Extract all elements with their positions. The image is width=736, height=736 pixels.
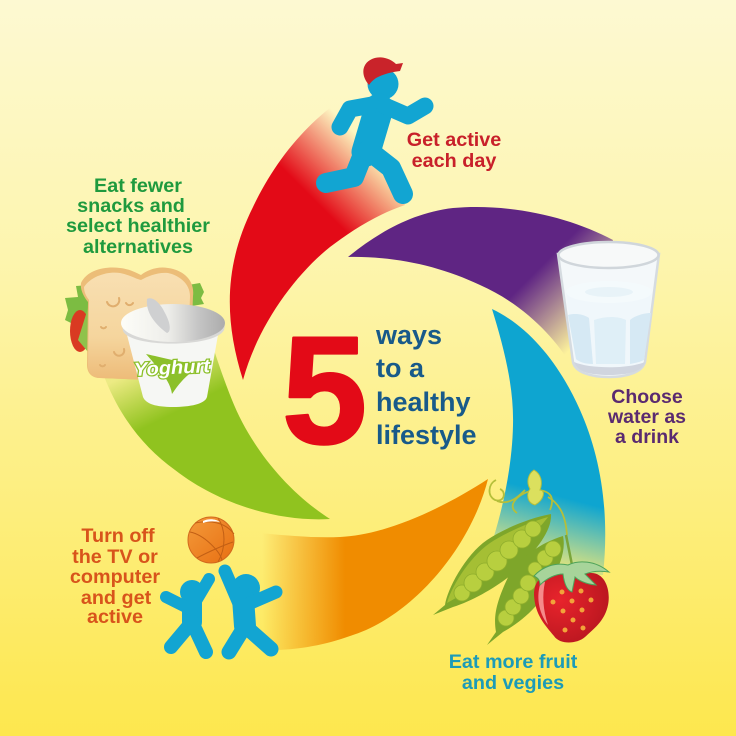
icon: pea pod right bbox=[487, 536, 564, 645]
icon: pea pod left bbox=[433, 514, 551, 615]
label: eat more fruit bbox=[449, 651, 578, 694]
label: eat fewer snacks: select healthier bbox=[66, 215, 210, 237]
label: turn off the tv: and get bbox=[81, 587, 152, 609]
icon: strawberry bbox=[534, 562, 609, 642]
icon: glass of water bbox=[558, 242, 659, 377]
label: turn off the tv: computer bbox=[70, 566, 160, 588]
swirl segment: green bbox=[100, 350, 330, 519]
label: eat more fruit: Eat more fruit bbox=[449, 651, 578, 673]
label: choose water: Choose bbox=[611, 386, 683, 408]
label: turn off the tv: Turn off bbox=[81, 525, 155, 547]
label: eat more fruit: and vegies bbox=[462, 672, 564, 694]
icon: red cap bbox=[363, 57, 403, 85]
centre heading bbox=[282, 305, 477, 476]
swirl segment: purple bbox=[348, 207, 613, 366]
icon: jumping children bbox=[166, 571, 276, 652]
label: get active: Get active bbox=[407, 129, 501, 151]
icon: child right bbox=[225, 571, 276, 652]
label: get active bbox=[407, 129, 501, 172]
icon: child left bbox=[166, 579, 209, 652]
heading words: to a bbox=[376, 353, 425, 383]
heading words: ways bbox=[375, 320, 442, 350]
icon: pea leaf bbox=[528, 470, 543, 505]
swirl segment: red bbox=[230, 97, 405, 380]
icon: basketball bbox=[188, 517, 234, 563]
icon: running figure bbox=[326, 57, 425, 194]
icon: pea vines bbox=[489, 470, 572, 565]
label: eat fewer snacks bbox=[66, 175, 210, 258]
label: choose water: a drink bbox=[615, 426, 679, 448]
label: choose water bbox=[607, 386, 686, 448]
label: get active: each day bbox=[412, 150, 496, 172]
label: turn off the tv bbox=[70, 525, 160, 628]
heading words bbox=[375, 320, 477, 450]
label: eat fewer snacks: snacks and bbox=[77, 195, 185, 217]
label: eat fewer snacks: Eat fewer bbox=[94, 175, 182, 197]
big number 5: 5 bbox=[282, 305, 367, 476]
label: turn off the tv: active bbox=[87, 606, 143, 628]
icon: sandwich bbox=[65, 267, 204, 380]
yoghurt label: Yoghurt bbox=[133, 356, 211, 381]
label: eat fewer snacks: alternatives bbox=[83, 236, 193, 258]
icon: yoghurt pot bbox=[121, 298, 225, 407]
icon: strawberry leaves bbox=[534, 562, 609, 592]
label: turn off the tv: the TV or bbox=[72, 546, 158, 568]
swirl segment: blue bbox=[480, 309, 605, 575]
swirl segment: orange bbox=[260, 479, 488, 650]
label: choose water: water as bbox=[607, 406, 686, 428]
heading words: healthy bbox=[376, 387, 471, 417]
heading words: lifestyle bbox=[376, 420, 477, 450]
